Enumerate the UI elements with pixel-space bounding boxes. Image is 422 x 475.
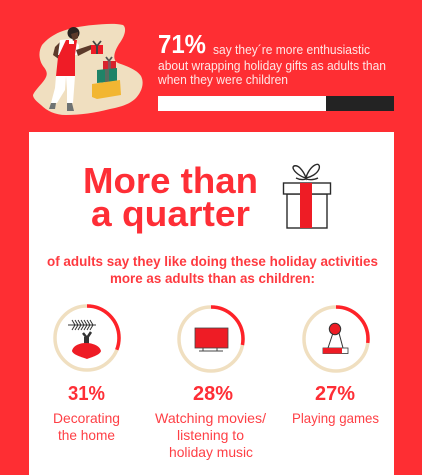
label [53, 410, 120, 443]
stat number: 71% [158, 29, 206, 59]
illustration: person wrapping gifts [33, 24, 143, 115]
white panel [29, 132, 394, 475]
person [49, 27, 92, 111]
gift stack [91, 41, 121, 99]
subheading: more as adults than as children: [110, 270, 315, 286]
heading [83, 160, 258, 234]
subheading [47, 253, 378, 286]
activity: decorating the home [53, 306, 120, 443]
heading: More than [83, 160, 258, 201]
ring chart: 27% [304, 307, 368, 371]
stat description: say they´re more enthusiastic [213, 43, 370, 57]
ring chart: 31% [55, 306, 119, 370]
icon: gift box [284, 164, 330, 228]
stat description: about wrapping holiday gifts as adults than [158, 59, 386, 73]
progress bar: 71% [158, 96, 394, 111]
label: Watching movies/ [155, 410, 266, 426]
label: holiday music [169, 444, 253, 460]
label: listening to [177, 427, 244, 443]
percentage: 31% [68, 383, 105, 405]
label [155, 410, 266, 460]
ring chart: 28% [179, 307, 243, 371]
icon: ornament and branch [68, 320, 101, 359]
stat: 71% [157, 29, 386, 87]
subheading: of adults say they like doing these holiday activities [47, 253, 378, 269]
activity: watching movies [155, 307, 266, 460]
percentage: 27% [315, 383, 355, 405]
icon: television [195, 328, 228, 351]
beige blob [33, 24, 143, 115]
activity: playing games [292, 307, 379, 426]
heading: a quarter [91, 193, 250, 234]
percentage: 28% [193, 383, 233, 405]
label: Playing games [292, 410, 379, 426]
stat description: when they were children [157, 73, 288, 87]
icon: joystick [323, 323, 348, 354]
label: Decorating [53, 410, 120, 426]
label: the home [58, 427, 115, 443]
stat description [157, 43, 386, 87]
